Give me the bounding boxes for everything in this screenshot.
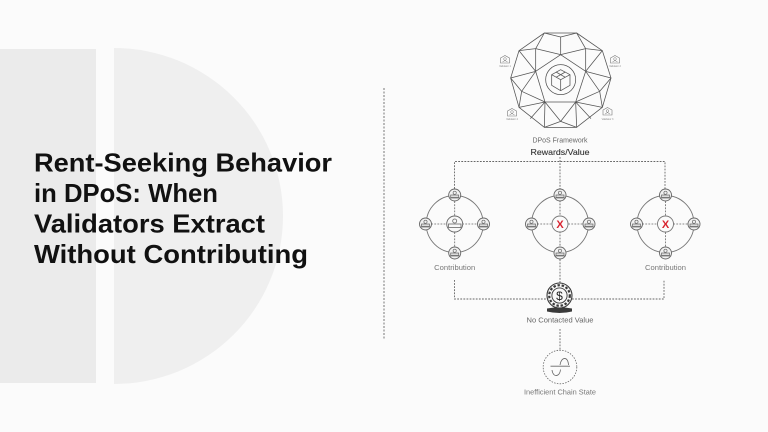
label: Rewards/Value: Rewards/Value <box>530 147 590 157</box>
label: DPoS Framework: DPoS Framework <box>532 138 588 144</box>
icons: validators around framework: Validator 3 <box>602 118 614 121</box>
validator ring: center <box>526 189 595 259</box>
title: Without Contributing <box>34 239 308 269</box>
icons: validators around framework: Validator 1 <box>499 65 511 68</box>
title: Validators Extract <box>34 208 265 238</box>
icons: validators around framework: Validator 4 <box>506 118 518 121</box>
validator ring: center: X <box>556 219 564 231</box>
icon: DPoS framework polyhedron <box>511 33 611 127</box>
dashed connectors: rewards <box>454 157 665 351</box>
icon: coin stack: $ <box>556 289 563 303</box>
icon: coin stack <box>547 283 572 313</box>
validator ring: right <box>630 189 700 259</box>
label: No Contacted Value: No Contacted Value <box>526 318 594 324</box>
label: Contribution left: Contribution <box>434 265 475 272</box>
background letter D: bar <box>0 49 96 383</box>
icons: validators around framework: Validator 2 <box>609 65 621 68</box>
title: Rent-Seeking Behavior <box>34 147 332 177</box>
icons: validators around framework <box>499 56 621 121</box>
title: in DPoS: When <box>34 178 218 208</box>
label: Contribution right: Contribution <box>645 265 686 272</box>
validator ring: right: X <box>662 219 670 231</box>
vertical dashed divider <box>383 88 385 340</box>
background letter D: bowl <box>114 48 283 384</box>
icon: inefficient state dashed circle <box>543 350 577 384</box>
validator ring: left <box>420 189 490 259</box>
label: Inefficient Chain State: Inefficient Chain State <box>524 390 596 396</box>
title <box>34 147 332 269</box>
